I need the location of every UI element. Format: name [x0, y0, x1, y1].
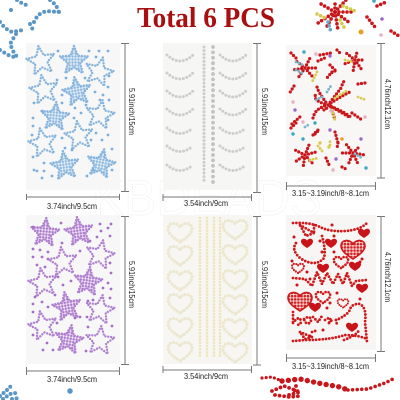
solid small hearts: [301, 229, 370, 332]
dimension: fireworks sheet width: 3.15~3.19inch/8~8.1cm: [292, 188, 369, 198]
pearl columns: [200, 218, 220, 358]
yellow and blue firework rays: [296, 60, 366, 160]
red firework rays: [289, 50, 365, 170]
dimension: white pearl sheet width: 3.54inch/9cm: [184, 198, 228, 208]
panel: ivory pearl heart sticker sheet: [163, 215, 252, 364]
dotted small hearts: [292, 257, 348, 308]
dimension: blue sheet height: 5.91inch/15cm: [127, 88, 137, 135]
outline purple stars: [26, 215, 117, 354]
filled blue stars: [40, 46, 118, 180]
dimension: purple sheet width: 3.74inch/9.5cm: [47, 374, 97, 384]
dimension: ivory sheet height: 5.91inch/15cm: [260, 261, 270, 308]
pearl swags: [167, 47, 246, 183]
panel: white pearl sticker sheet: [163, 43, 252, 190]
dimension: ivory sheet width: [163, 366, 252, 381]
dimension: blue sheet height: [121, 44, 137, 192]
decoration: red fireworks top right: [317, 0, 399, 36]
decoration: red rhinestone bow bottom right: [262, 377, 395, 397]
dimension: fireworks sheet height: 4.76inch/12.1cm: [383, 79, 393, 129]
dimension: red sheet height: [377, 216, 393, 352]
decoration: blue rhinestones bottom left: [0, 386, 70, 399]
dimension: red sheet width: 3.15~3.19inch/8~8.1cm: [292, 361, 369, 371]
dimension: white pearl sheet width: [163, 194, 252, 208]
decoration: blue rhinestone chain top left: [0, 0, 60, 58]
dimension: blue sheet width: 3.74inch/9.5cm: [47, 201, 97, 211]
small purple dots: [33, 223, 112, 351]
small blue dots: [32, 51, 112, 178]
panel: purple star sticker sheet: [26, 215, 120, 364]
dimension: fireworks sheet width: [286, 182, 376, 198]
panel: red hearts sticker sheet: [286, 215, 376, 350]
dimension: red sheet height: 4.76inch/12.1cm: [383, 252, 393, 302]
panel: blue star sticker sheet: [24, 43, 120, 190]
watermark: KBDEADS: [92, 170, 322, 226]
dimension: purple sheet height: [121, 216, 137, 364]
dimension: fireworks sheet height: [377, 44, 393, 178]
dimension: white pearl sheet height: 5.91inch/15cm: [260, 88, 270, 135]
dimension: blue sheet width: [26, 194, 120, 211]
dimension: purple sheet height: 5.91inch/15cm: [127, 261, 137, 308]
dimension: ivory sheet height: [253, 216, 270, 365]
red dotted lines: [293, 223, 367, 342]
pearl hearts: [168, 220, 247, 362]
filled rhinestone hearts: [288, 240, 365, 311]
dimension: white pearl sheet height: [253, 44, 270, 192]
dimension: purple sheet width: [26, 367, 120, 384]
outline blue stars: [24, 44, 118, 180]
filled purple stars: [30, 215, 104, 354]
dimension: ivory sheet width: 3.54inch/9cm: [184, 371, 228, 381]
coloured dots: [293, 52, 366, 170]
title: Total 6 PCS: [137, 3, 275, 34]
dimension: red sheet width: [286, 354, 376, 371]
scattered red dots: [292, 225, 362, 336]
panel: fireworks sticker sheet: [286, 45, 376, 176]
